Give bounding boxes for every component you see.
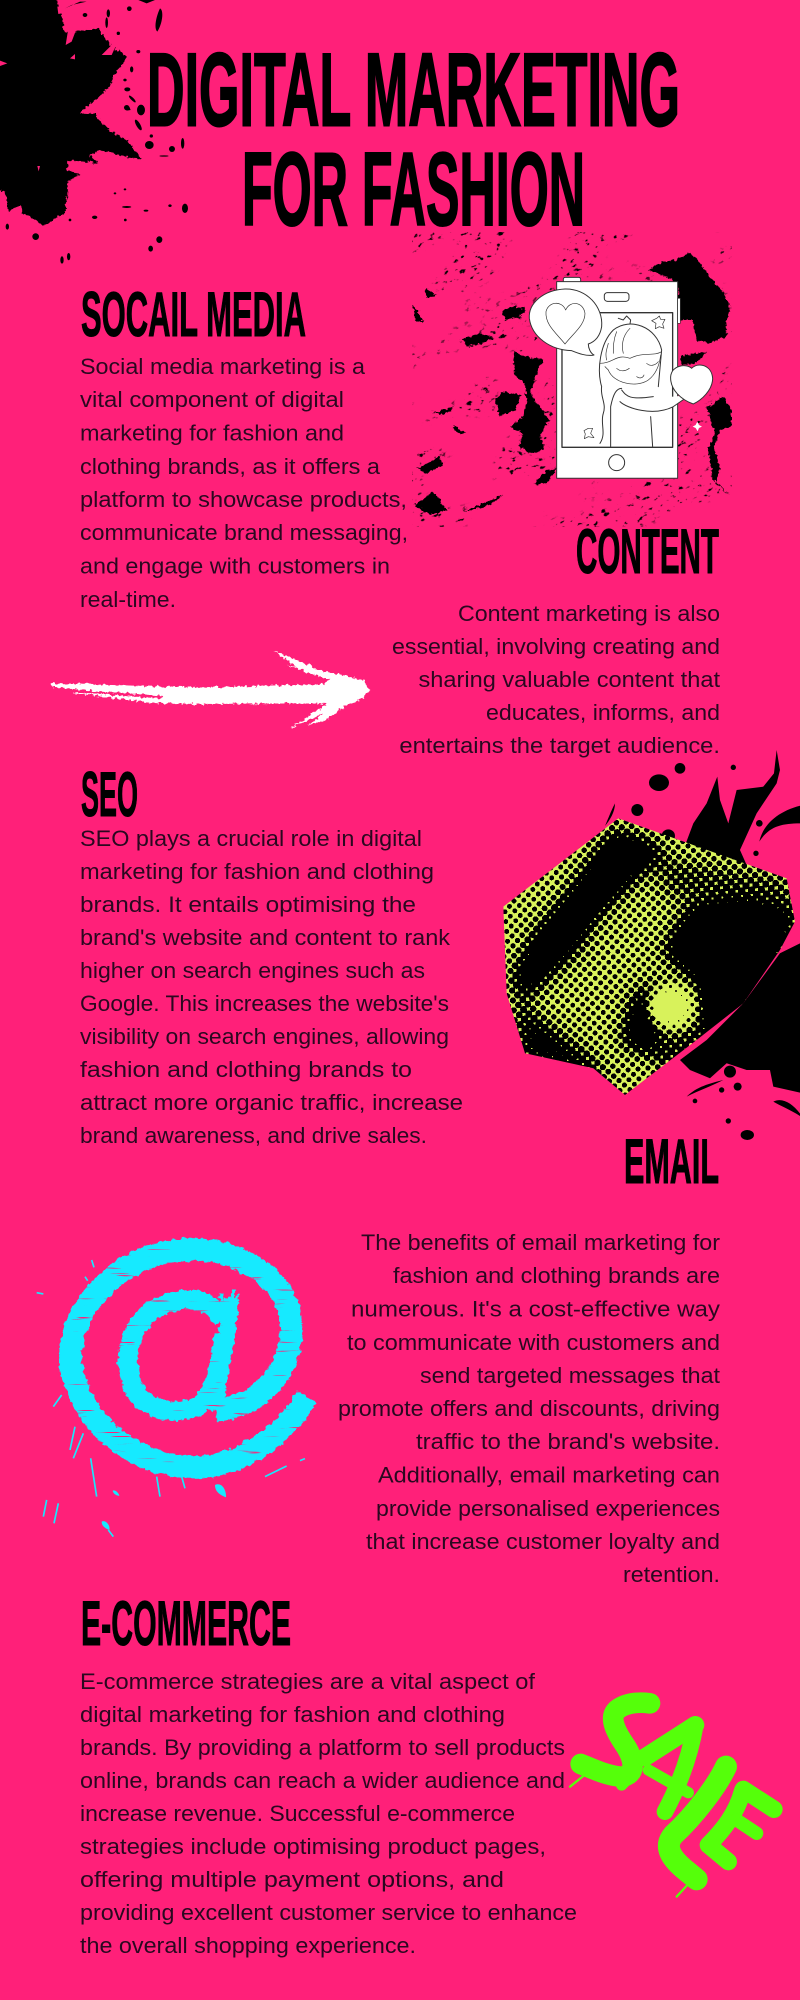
text: content: educates, informs, and: [486, 700, 720, 725]
phone body: [557, 277, 680, 478]
text: e-commerce: offering multiple payment options, and: [80, 1867, 504, 1892]
text: social media: real-time.: [80, 587, 176, 612]
text: social media: and engage with customers in: [80, 554, 390, 578]
text: social media: Social media marketing is a: [80, 354, 366, 379]
text: seo: Google. This increases the website's: [80, 991, 449, 1016]
text: seo: fashion and clothing brands to: [80, 1057, 412, 1082]
text: seo: marketing for fashion and clothing: [80, 859, 434, 884]
text: e-commerce: increase revenue. Successful e-commerce: [80, 1801, 515, 1826]
text: social media: marketing for fashion and: [80, 420, 344, 446]
infographic canvas: SEO: [81, 760, 138, 830]
text: email: that increase customer loyalty and: [366, 1529, 720, 1554]
speech bubble with heart: [529, 289, 602, 355]
text: e-commerce: digital marketing for fashion and clothing: [80, 1702, 505, 1727]
text: e-commerce: brands. By providing a platform to sell products: [80, 1735, 565, 1760]
text: email: The benefits of email marketing for: [361, 1230, 720, 1255]
text: email: retention.: [623, 1562, 720, 1587]
title: [147, 32, 680, 248]
text: email: [338, 1230, 720, 1587]
grunge ink texture: [412, 232, 732, 527]
text: email: numerous. It's a cost-effective way: [351, 1296, 720, 1322]
text: e-commerce: E-commerce strategies are a vital aspect of: [80, 1669, 536, 1694]
heart: [671, 365, 713, 404]
text: social media: [80, 354, 408, 612]
text: email: send targeted messages that: [420, 1363, 720, 1388]
text: email: promote offers and discounts, driving: [338, 1396, 720, 1421]
paint drips: [37, 1260, 305, 1537]
text: social media: vital component of digital: [80, 387, 344, 412]
text: seo: higher on search engines such as: [80, 958, 425, 983]
text: seo: brand awareness, and drive sales.: [80, 1123, 427, 1148]
girl illustration: [584, 316, 690, 447]
text: content: Content marketing is also: [458, 601, 720, 626]
text: seo: brands. It entails optimising the: [80, 892, 416, 917]
text: social media: clothing brands, as it offers a: [80, 454, 381, 479]
text: content: essential, involving creating and: [392, 634, 720, 659]
text: email: traffic to the brand's website.: [416, 1429, 720, 1454]
text: email: provide personalised experiences: [376, 1496, 720, 1521]
icon: sale graffiti: [570, 1703, 774, 1897]
icon: at sign: [37, 1249, 307, 1537]
text: content: sharing valuable content that: [418, 667, 720, 692]
arrow: [52, 651, 369, 728]
text: seo: attract more organic traffic, increase: [80, 1090, 463, 1115]
text: e-commerce: providing excellent customer service to enhance: [80, 1900, 577, 1925]
text: seo: SEO plays a crucial role in digital: [80, 826, 422, 851]
text: email: fashion and clothing brands are: [393, 1263, 720, 1288]
text: email: Additionally, email marketing can: [378, 1462, 720, 1488]
brush strokes: [71, 1249, 307, 1468]
halftone image: [497, 813, 800, 1100]
text: e-commerce: [80, 1669, 577, 1958]
text: e-commerce: strategies include optimising product pages,: [80, 1834, 546, 1859]
infographic canvas: SOCAIL MEDIA: [81, 280, 306, 350]
text: e-commerce: online, brands can reach a wider audience and: [80, 1768, 565, 1793]
small star: [693, 422, 702, 431]
text: seo: visibility on search engines, allowing: [80, 1024, 449, 1049]
ink splatter: right: [605, 750, 800, 1140]
text: content: entertains the target audience.: [399, 733, 720, 758]
text: seo: brand's website and content to rank: [80, 925, 451, 950]
text: seo: [80, 826, 463, 1148]
infographic canvas: E-COMMERCE: [81, 1589, 291, 1659]
ink splatter: top left: [0, 0, 188, 264]
icon: phone with girl: [529, 277, 713, 478]
text: email: to communicate with customers and: [347, 1330, 720, 1355]
text: social media: communicate brand messaging,: [80, 520, 408, 545]
text: e-commerce: the overall shopping experience.: [80, 1933, 416, 1958]
text: social media: platform to showcase products,: [80, 487, 407, 512]
text: content: [392, 601, 720, 758]
